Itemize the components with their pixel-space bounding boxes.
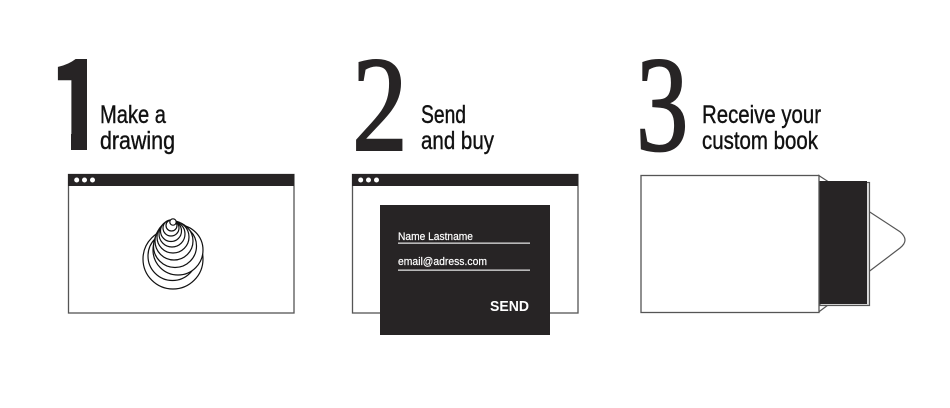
heading: receive your custom book: Receive your [702,101,821,129]
book pages [820,182,870,306]
name field: Name Lastname [398,231,473,243]
heading: make a drawing: Make a [100,101,166,129]
browser window 1 [68,174,294,313]
heading: receive your custom book: custom book [702,127,818,155]
step 3 [636,30,905,313]
numeral 1: 1 [48,5,107,186]
heading: make a drawing [100,101,175,155]
heading: send and buy: Send [421,101,466,129]
name field [398,231,530,244]
step 1 [58,59,295,314]
heading: make a drawing: drawing [100,127,175,155]
form panel [380,205,550,335]
envelope with book [641,175,905,312]
envelope corners [818,175,828,312]
numeral 2: 2 [352,29,408,180]
book cover [818,181,867,304]
flap [869,212,905,272]
heading: send and buy [421,101,494,155]
step 2 [352,29,578,335]
envelope body [641,176,819,312]
heading: receive your custom book [702,101,821,155]
numeral 3: 3 [636,30,688,180]
browser window 2 [352,174,578,313]
send button label: SEND [490,299,529,315]
heading: send and buy: and buy [421,127,494,155]
email field: email@adress.com [398,256,487,268]
email field [398,256,530,271]
drawing: nested circles [143,219,203,289]
